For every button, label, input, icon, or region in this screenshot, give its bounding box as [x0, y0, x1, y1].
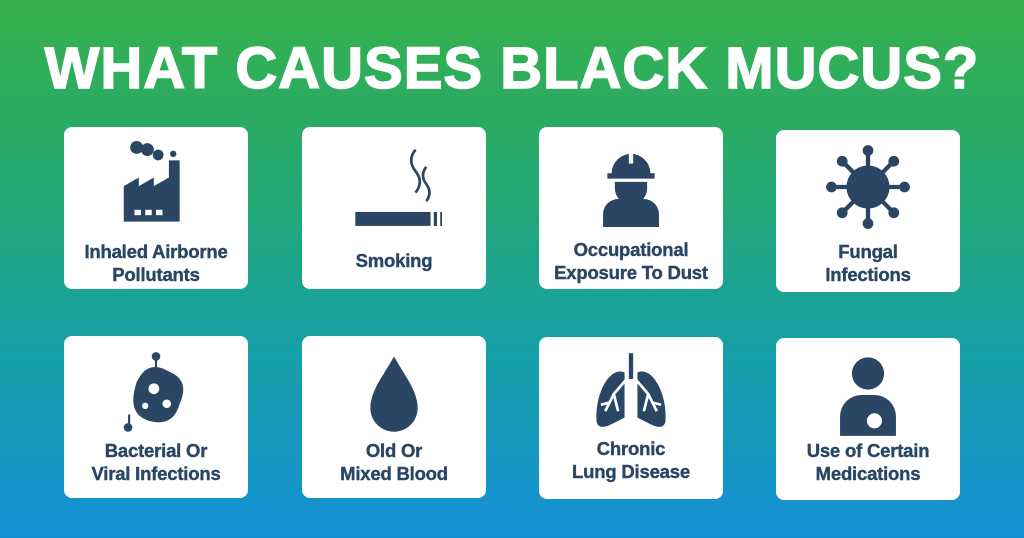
icon: lungs — [596, 353, 666, 427]
label — [84, 241, 228, 285]
label: Exposure To Dust — [554, 262, 708, 283]
label: Lung Disease — [572, 461, 690, 482]
title: WHAT CAUSES BLACK MUCUS? — [45, 36, 979, 101]
panel: bacterial or viral — [64, 336, 248, 498]
label: Fungal — [838, 241, 898, 262]
label: Viral Infections — [91, 463, 221, 484]
label: Smoking — [356, 250, 432, 271]
label — [572, 438, 690, 482]
panel: occupational exposure — [539, 127, 723, 289]
panel: chronic lung disease — [539, 337, 723, 499]
icon: cigarette — [355, 148, 442, 226]
label — [91, 440, 221, 484]
label — [825, 241, 911, 285]
label: Occupational — [574, 239, 688, 260]
label: Pollutants — [112, 264, 200, 285]
label: Mixed Blood — [340, 463, 448, 484]
label: Old Or — [366, 440, 422, 461]
label — [340, 440, 448, 484]
label: Chronic — [597, 438, 665, 459]
icon: bacteria — [124, 352, 184, 432]
label — [554, 239, 708, 284]
panel: medications — [776, 338, 960, 500]
panel: inhaled airborne pollutants — [64, 127, 248, 289]
icon: virus — [826, 145, 910, 229]
panel: old or mixed blood — [302, 336, 486, 498]
label: Infections — [825, 264, 911, 285]
label: Use of Certain — [807, 440, 929, 461]
panel: fungal infections — [776, 130, 960, 292]
icon: factory — [124, 141, 180, 222]
label: Bacterial Or — [105, 440, 207, 461]
label — [807, 440, 929, 484]
icon: person — [840, 357, 896, 436]
label: Medications — [816, 463, 920, 484]
icon: drop — [370, 356, 418, 432]
label: Inhaled Airborne — [84, 241, 228, 262]
icon: worker — [603, 154, 659, 227]
panel: smoking — [302, 127, 486, 289]
